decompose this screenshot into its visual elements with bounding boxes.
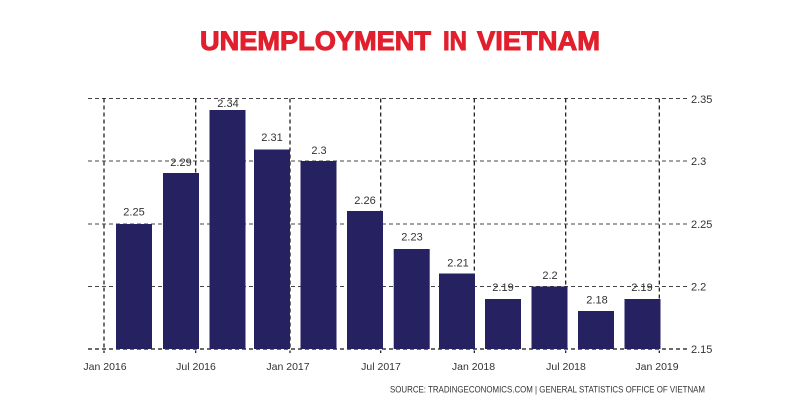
title: VIETNAM bbox=[477, 26, 600, 56]
x axis labels: Jan 2017 bbox=[266, 361, 310, 373]
y axis labels: 2.35 bbox=[691, 94, 712, 106]
vertical grid lines bbox=[104, 98, 659, 353]
bar value labels: 2.19 bbox=[492, 282, 514, 294]
bar value labels: 2.18 bbox=[586, 294, 608, 306]
bars bbox=[116, 110, 660, 349]
title: UNEMPLOYMENT bbox=[200, 26, 432, 56]
x axis labels: Jan 2016 bbox=[83, 361, 127, 373]
bar value labels: 2.23 bbox=[401, 232, 423, 244]
x axis labels: Jul 2018 bbox=[546, 361, 586, 373]
bar value labels: 2.29 bbox=[170, 157, 192, 169]
x axis labels: Jul 2017 bbox=[361, 361, 401, 373]
y axis labels bbox=[691, 94, 712, 356]
source note: SOURCE: TRADINGECONOMICS.COM | GENERAL STATISTICS OFFICE OF VIETNAM bbox=[390, 384, 705, 394]
chart: unemployment bar chart bbox=[83, 94, 712, 373]
horizontal grid lines bbox=[88, 98, 687, 349]
bar value labels: 2.21 bbox=[447, 258, 469, 270]
bar value labels: 2.31 bbox=[261, 132, 283, 144]
bar value labels: 2.3 bbox=[311, 145, 327, 157]
x axis labels: Jan 2018 bbox=[452, 361, 495, 373]
y axis labels: 2.25 bbox=[691, 219, 712, 231]
title: IN bbox=[443, 26, 467, 56]
bar value labels: 2.2 bbox=[542, 270, 558, 282]
y axis labels: 2.15 bbox=[691, 344, 712, 356]
bar value labels: 2.19 bbox=[631, 282, 653, 294]
x axis labels: Jan 2019 bbox=[635, 361, 679, 373]
bar value labels: 2.26 bbox=[354, 195, 376, 207]
bar value labels: 2.34 bbox=[217, 98, 239, 110]
title bbox=[200, 26, 600, 56]
bar value labels bbox=[123, 98, 653, 306]
x axis labels bbox=[83, 361, 679, 373]
y axis labels: 2.2 bbox=[691, 282, 706, 294]
x axis labels: Jul 2016 bbox=[176, 361, 216, 373]
bar value labels: 2.25 bbox=[123, 206, 145, 218]
y axis labels: 2.3 bbox=[691, 156, 706, 168]
